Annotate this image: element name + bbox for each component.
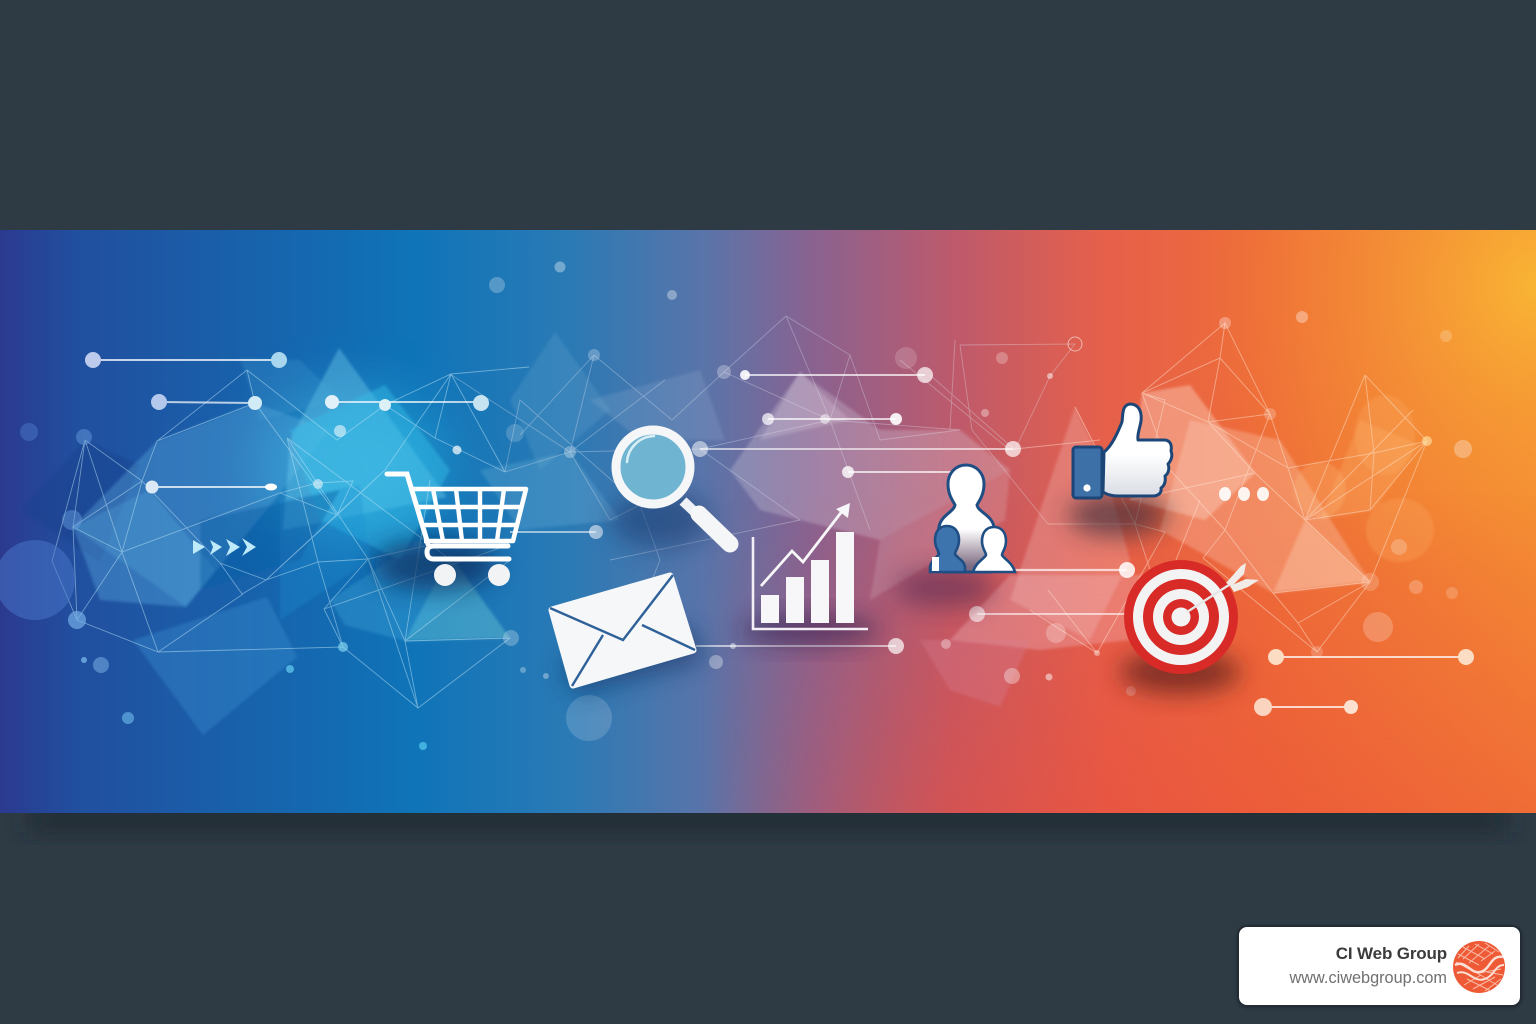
three dots (1219, 487, 1269, 501)
soft glow: cyan behind cart (260, 395, 440, 535)
decorative dots: scattered (0, 262, 1472, 750)
icon: bar chart with rising arrow (753, 503, 868, 629)
icon: brand logo globe (1453, 941, 1505, 993)
banner artwork (0, 230, 1536, 835)
icon: thumbs up (1073, 404, 1172, 498)
chevron arrows (193, 538, 256, 556)
connector lines with end dots (85, 352, 1474, 716)
icon: people group (930, 465, 1015, 572)
icon: envelope (550, 575, 695, 686)
gradient banner (0, 230, 1536, 813)
network lines: left (52, 367, 529, 708)
icon: target with arrow (1124, 560, 1259, 674)
brand name: CI Web Group (1336, 944, 1447, 963)
banner drop shadow (30, 806, 1506, 832)
translucent polygons: left cluster (22, 348, 510, 735)
icon: magnifying glass (616, 430, 730, 544)
logo card (1239, 927, 1520, 1005)
icon: shopping cart (387, 474, 526, 586)
website url: www.ciwebgroup.com (1290, 969, 1447, 987)
translucent polygons: middle cluster (480, 332, 1010, 600)
translucent polygons: right cluster (920, 385, 1434, 707)
network lines: right (1005, 323, 1427, 653)
network lines: middle (450, 316, 1075, 580)
icon shadows (373, 492, 1240, 695)
